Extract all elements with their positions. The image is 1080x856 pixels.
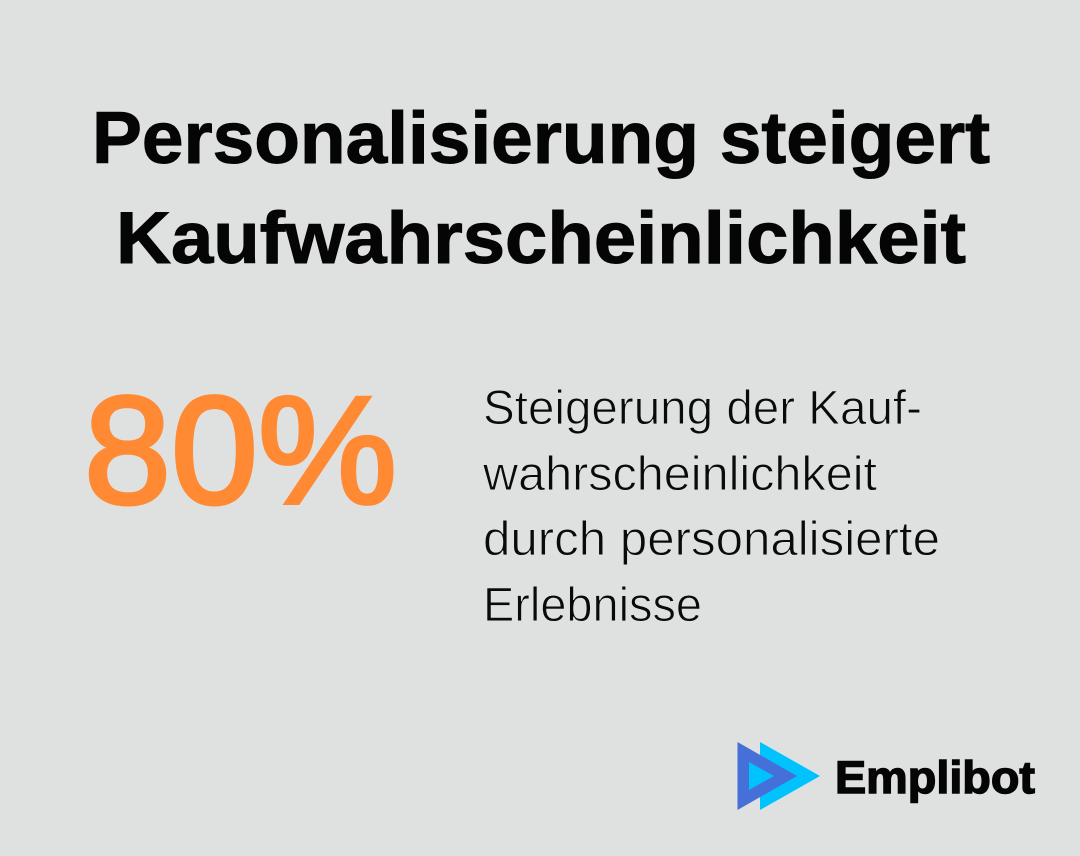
description text: durch personalisierte [483, 513, 940, 566]
title: Kaufwahrscheinlichkeit [116, 198, 966, 279]
description text: Steigerung der Kauf- [483, 382, 922, 435]
logo wordmark: Emplibot [835, 752, 1035, 803]
description text: Erlebnisse [483, 579, 702, 632]
icon: play triangles [738, 742, 820, 810]
title: Personalisierung steigert [92, 98, 990, 179]
description text [482, 382, 940, 632]
title [92, 98, 990, 279]
description text: wahrscheinlichkeit [482, 448, 877, 501]
logo: Emplibot [738, 742, 1035, 810]
statistic: 80%: 80% [84, 365, 397, 536]
